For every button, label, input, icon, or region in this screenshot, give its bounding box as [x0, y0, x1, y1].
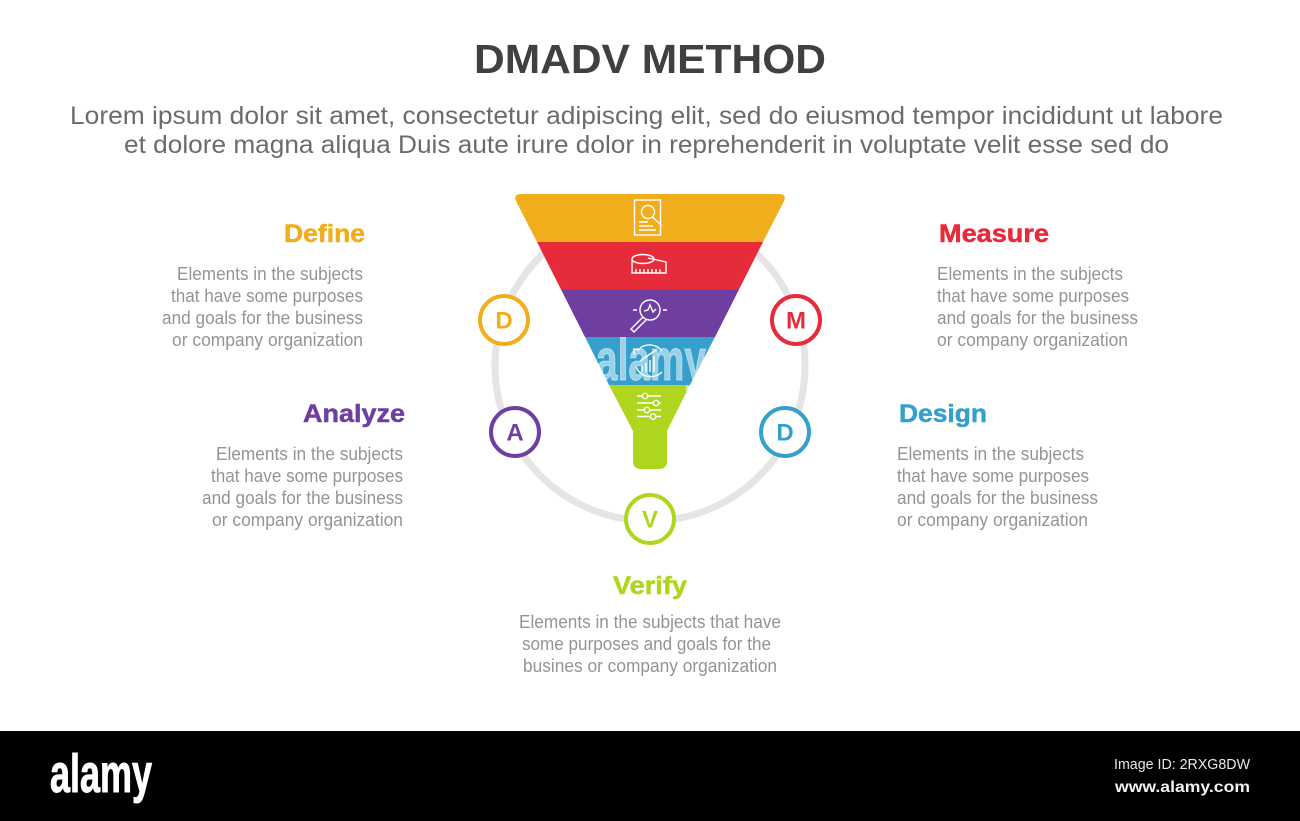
badge: A analyze: A [506, 420, 524, 446]
panel: analyze: or company organization [212, 510, 403, 530]
image id: Image ID: 2RXG8DW [1114, 756, 1251, 773]
panel: design [897, 400, 1098, 530]
footer bar [0, 731, 1300, 821]
subtitle text: Lorem ipsum dolor sit amet, consectetur adipiscing elit, sed do eiusmod tempor incididunt ut labore [70, 102, 1223, 130]
panel: design: that have some purposes [897, 466, 1089, 486]
panel: measure: that have some purposes [937, 286, 1129, 306]
panel: define [162, 220, 365, 350]
badge: M measure: M [786, 308, 806, 334]
subtitle text: et dolore magna aliqua Duis aute irure dolor in reprehenderit in voluptate velit esse sed do [124, 131, 1169, 159]
panel: verify: Verify [613, 572, 687, 600]
badge: A analyze [491, 408, 539, 456]
panel: measure [937, 220, 1138, 350]
badge: V verify: V [642, 506, 658, 534]
panel: analyze: and goals for the business [202, 488, 403, 508]
panel: design: or company organization [897, 510, 1088, 530]
panel: verify: busines or company organization [523, 656, 777, 676]
panel: design: and goals for the business [897, 488, 1098, 508]
panel: design: Elements in the subjects [897, 444, 1084, 464]
icon: document search [634, 200, 662, 235]
panel: design: Design [899, 400, 987, 428]
panel: analyze: that have some purposes [211, 466, 403, 486]
panel: verify: some purposes and goals for the [522, 634, 771, 654]
grey ring [495, 211, 805, 521]
panel: define: and goals for the business [162, 308, 363, 328]
panel: analyze: Elements in the subjects [216, 444, 403, 464]
panel: define: Define [284, 220, 365, 248]
funnel [515, 194, 785, 469]
watermark: alamy [596, 328, 706, 393]
subtitle text [70, 102, 1223, 159]
badge: V verify [626, 495, 674, 543]
panel: define: Elements in the subjects [177, 264, 363, 284]
icon: measuring tape [632, 254, 666, 273]
icon: sliders [637, 393, 661, 419]
panel: analyze [202, 400, 405, 530]
panel: measure: Measure [939, 220, 1049, 248]
badge: D define: D [495, 308, 513, 334]
badge: D design [761, 408, 809, 456]
panel: define: that have some purposes [171, 286, 363, 306]
panel: verify: Elements in the subjects that have [519, 612, 781, 632]
icon: growth cycle [634, 345, 662, 377]
badge: D define [480, 296, 528, 344]
icon: magnifier chart [631, 300, 667, 332]
title: DMADV METHOD [474, 36, 826, 82]
panel: measure: Elements in the subjects [937, 264, 1123, 284]
alamy logo: alamy [50, 744, 152, 804]
panel: analyze: Analyze [303, 400, 405, 428]
panel: define: or company organization [172, 330, 363, 350]
panel: measure: or company organization [937, 330, 1128, 350]
badge: D design: D [776, 420, 794, 446]
website: www.alamy.com [1114, 779, 1250, 796]
panel: measure: and goals for the business [937, 308, 1138, 328]
badge: M measure [772, 296, 820, 344]
panel: verify [519, 572, 781, 676]
